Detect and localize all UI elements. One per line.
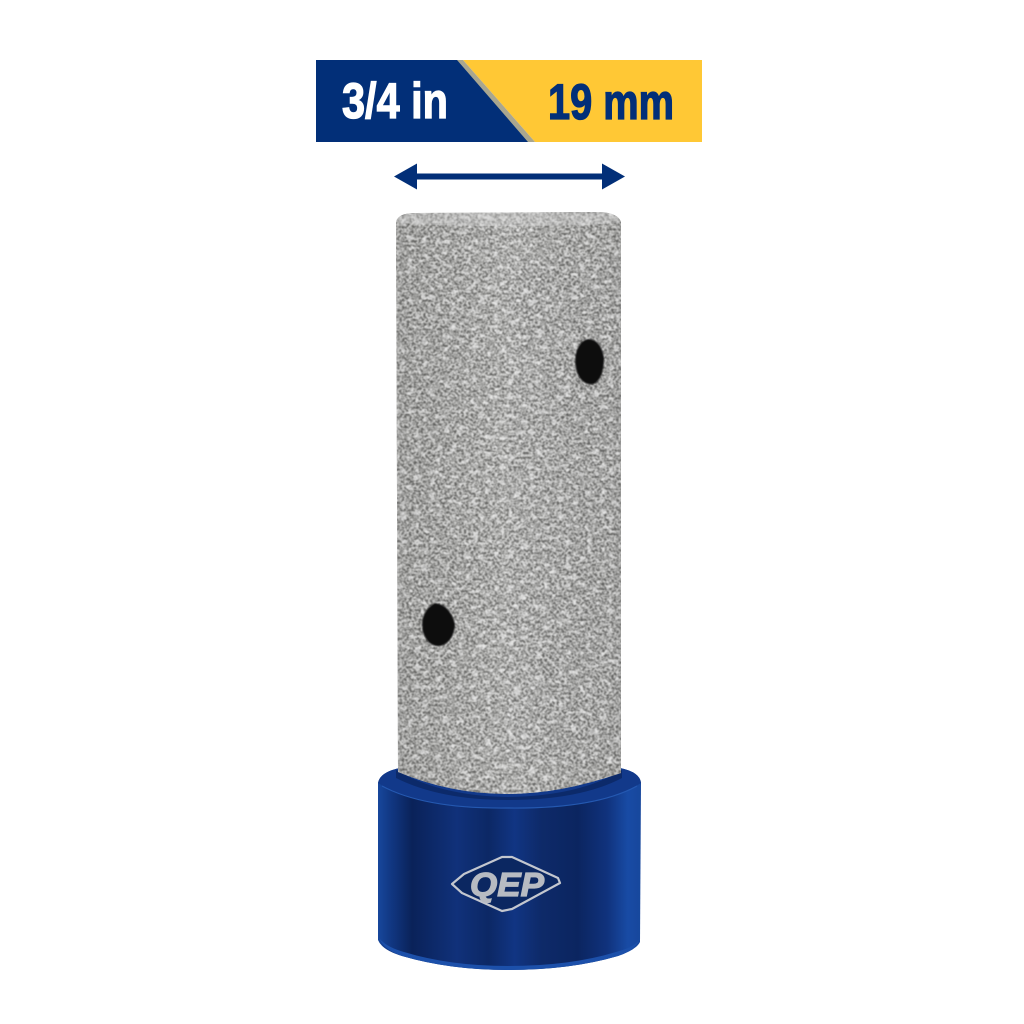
cylinder: base: [390, 205, 630, 800]
arrow: diameter dimension: [394, 164, 625, 190]
collar: bottom edge: [379, 938, 640, 970]
label: 19 mm: 19 mm: [548, 74, 674, 130]
collar: body: [378, 768, 641, 970]
cylinder: top cap: [396, 212, 621, 226]
collar: top rim: [378, 768, 641, 808]
badge: metric panel: [463, 60, 702, 142]
hole: lower left: [422, 603, 455, 646]
cylinder: shading: [397, 220, 621, 792]
QEP logo: [452, 857, 560, 911]
label: 3/4 in: 3/4 in: [342, 73, 448, 129]
cylinder: bright glints: [390, 205, 630, 800]
blue collar: [378, 768, 641, 970]
logo: diamond outline: [452, 857, 560, 911]
size badge: [316, 60, 702, 142]
badge: diagonal divider: [457, 60, 535, 142]
badge: inch panel: [316, 60, 529, 142]
cylinder: grain texture: [390, 205, 630, 800]
collar: inner recess: [396, 770, 622, 800]
logo: QEP wordmark: QEP: [470, 866, 545, 903]
hole: upper right: [575, 339, 604, 384]
collar: rim edge highlight: [382, 786, 637, 808]
diamond bit cylinder: [390, 205, 630, 800]
